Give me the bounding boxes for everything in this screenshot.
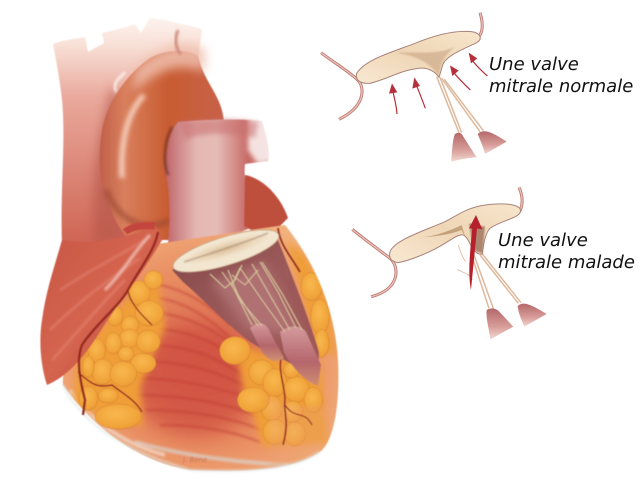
arrows [393,58,487,114]
chordae [437,77,483,133]
label: diseased valve: mitrale malade [498,252,635,273]
atrial appendage [244,175,288,236]
illustration: normal mitral valve [321,13,507,162]
regurgitation arrow [469,215,482,290]
chordae [458,245,521,308]
label: diseased valve [498,230,635,273]
illustration: diseased mitral valve [352,187,547,339]
aorta highlight [122,95,144,178]
right atrium [40,225,162,385]
muscle fibres [135,285,262,442]
papillary muscles [250,323,284,361]
fat regions [73,240,335,447]
chordae tendineae [210,262,302,332]
mitral valve ring [169,222,283,280]
vessel shading [93,85,130,245]
superior vena cava and vessel tops [53,18,202,244]
label: normal valve: mitrale normale [489,76,633,97]
signature: J. Bene [181,456,207,464]
aorta arch [100,30,224,240]
papillary muscles [486,308,513,339]
valve walls [321,13,482,119]
heart body [63,225,340,471]
leaflets [390,204,521,263]
pulmonary trunk [165,116,278,262]
valve walls [352,187,522,297]
label: normal valve: Une valve [489,54,579,75]
coronary arteries [78,228,312,445]
left ventricle cavity [172,232,321,386]
papillary muscles [451,133,477,162]
label: diseased valve: Une valve [498,230,588,251]
fat lobes [79,271,329,446]
leaflets [356,31,480,83]
illustration: heart [40,18,340,471]
label: normal valve [489,54,633,97]
